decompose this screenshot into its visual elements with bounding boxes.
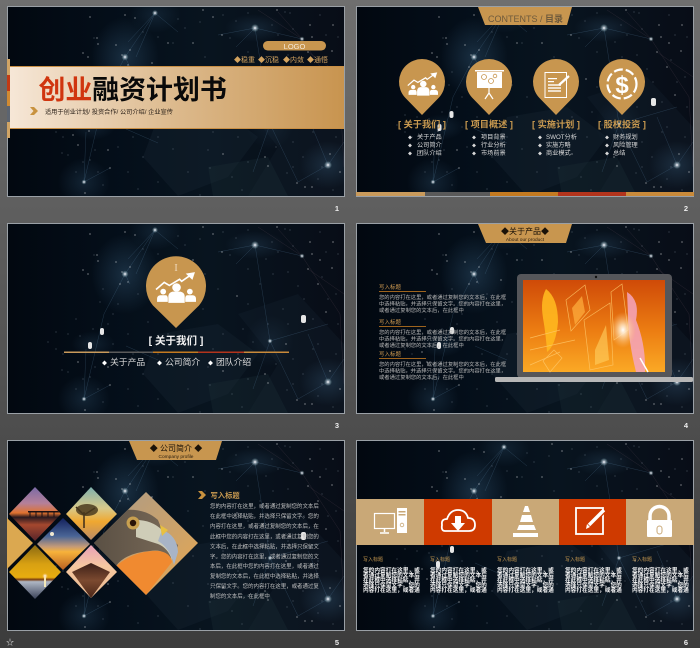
text block 1: 或者通过复制您的文本后，在此框中 xyxy=(379,306,464,314)
text block 3: 您的内容打在这里，或者通过复制您的文本后，在此框 xyxy=(379,360,507,368)
pin 1: about us: [ 关于我们 ] xyxy=(398,118,446,130)
subtitle: 适用于创业计划/ 投资合作/ 公司介绍/ 企业宣传 xyxy=(45,108,173,116)
heading tab xyxy=(129,441,222,460)
pin 2: project overview: 项目背景 xyxy=(481,133,506,141)
column 3 xyxy=(497,556,554,594)
pin 1: about us: 团队介绍 xyxy=(417,149,442,157)
section items: ◆ xyxy=(208,361,213,367)
column 3: 您的内容打在这里，或 xyxy=(497,566,554,574)
body text: 内容打在这里，或者通过复制您的文本后，在 xyxy=(210,522,319,530)
pin 2: project overview: ◆ xyxy=(472,151,476,156)
text block 3: 写入标题 xyxy=(379,350,402,358)
keyword tags: ◆通悟 xyxy=(307,55,328,64)
pin 1: about us: ◆ xyxy=(408,135,412,140)
pin 3: implementation plan: [ 实施计划 ] xyxy=(532,118,580,130)
column 5: 内容打在这里，或者通 xyxy=(632,586,689,594)
transition marker: ☆ xyxy=(6,638,14,647)
icon: traffic cone xyxy=(513,506,538,537)
body text: 复制您的文本后，在此框中选择粘贴，并选择 xyxy=(210,572,319,580)
column 3: 在此框中选择粘贴，并 xyxy=(497,576,554,584)
moon sunset photo xyxy=(37,518,90,570)
body text: 文本后，在此框中选择粘贴，并选择只保留文 xyxy=(210,542,319,550)
column 2: 您的内容打在这里，或 xyxy=(430,566,487,574)
heading tab: Company profile xyxy=(159,454,194,460)
pin 4: equity investment: $ xyxy=(615,72,629,99)
column 2: 者通过复制您的文本后 xyxy=(430,571,487,579)
section items xyxy=(102,356,251,367)
section items: 公司简介 xyxy=(165,356,200,367)
pin 1: about us: 公司简介 xyxy=(417,141,443,149)
pin 1: about us: ◆ xyxy=(408,151,412,156)
pin 2: project overview: 市场前景 xyxy=(481,149,506,157)
column 5: 者通过复制您的文本后 xyxy=(632,571,689,579)
column 4: 您的内容打在这里，或 xyxy=(565,566,622,574)
column 5: 在此框中选择粘贴，并 xyxy=(632,576,689,584)
text block 3 xyxy=(379,350,507,381)
keyword tags: ◆稳重 xyxy=(234,55,255,64)
column 3: 选择只保留文字。您的 xyxy=(497,581,554,589)
main title: 创业融资计划书 xyxy=(38,75,227,105)
column 3: 者通过复制您的文本后 xyxy=(497,571,554,579)
page number 2: 2 xyxy=(684,204,688,213)
column 1: 写入标题 xyxy=(363,556,383,563)
column 2: 内容打在这里，或者通 xyxy=(430,586,487,594)
heading tab: About our product xyxy=(506,237,545,243)
section items: ◆ xyxy=(157,361,162,367)
body text: 本后，在此框中您的内容打在这里，或者通过 xyxy=(210,562,319,570)
comet markers xyxy=(88,315,306,349)
heading tab: ◆ 公司简介 ◆ xyxy=(150,443,202,453)
column 2 xyxy=(430,556,487,594)
pier sunset photo xyxy=(9,487,61,541)
icon: edit pencil xyxy=(576,508,604,534)
keyword tags: ◆内敛 xyxy=(283,55,304,64)
chevron xyxy=(30,107,38,115)
heading chevron xyxy=(198,491,206,499)
logo pill: LOGO xyxy=(284,42,305,51)
column 5: 您的内容打在这里，或 xyxy=(632,566,689,574)
column 1: 在此框中选择粘贴，并 xyxy=(363,576,420,584)
body text: 只保留文字。您的内容打在这里，或者通过复 xyxy=(210,582,319,590)
column 1 xyxy=(363,556,420,594)
section items: 关于产品 xyxy=(110,356,145,367)
slide 6: icon columns xyxy=(356,431,700,640)
text block 3: 中选择粘贴，并选择只保留文字。您的内容打在这里， xyxy=(379,366,506,374)
text block 1 xyxy=(379,283,507,314)
colour rule xyxy=(64,352,289,353)
column 3: 写入标题 xyxy=(497,556,517,563)
body text: 您的内容打在这里，或者通过复制您的文本后 xyxy=(210,502,319,510)
contents tab: CONTENTS / 目录 xyxy=(488,13,563,24)
column 4 xyxy=(565,556,622,594)
section items: 团队介绍 xyxy=(216,356,251,367)
column 2: 选择只保留文字。您的 xyxy=(430,581,487,589)
pin 4: equity investment: ◆ xyxy=(605,151,609,156)
pier boards photo xyxy=(66,545,118,598)
pin 3: implementation plan: 实施方略 xyxy=(546,141,572,149)
column 5: 写入标题 xyxy=(632,556,652,563)
column 4: 选择只保留文字。您的 xyxy=(565,581,622,589)
pin 2: project overview: 行业分析 xyxy=(481,141,506,149)
laptop xyxy=(495,274,693,382)
column 5: 选择只保留文字。您的 xyxy=(632,581,689,589)
column 3: 内容打在这里，或者通 xyxy=(497,586,554,594)
comet marker xyxy=(301,532,306,540)
text heading: 写入标题 xyxy=(210,491,240,500)
page number 1: 1 xyxy=(335,204,339,213)
text block 1: 中选择粘贴，并选择只保留文字。您的内容打在这里， xyxy=(379,300,506,308)
pin 2: project overview: ◆ xyxy=(472,143,476,148)
column 1: 内容打在这里，或者通 xyxy=(363,586,420,594)
page number 5: 5 xyxy=(335,638,339,647)
pin 4: equity investment: ◆ xyxy=(605,135,609,140)
gold diamond xyxy=(7,518,33,569)
lighthouse photo xyxy=(9,545,61,599)
title band xyxy=(10,66,344,129)
keyword tags: ◆沉稳 xyxy=(258,55,279,64)
text block 1: 写入标题 xyxy=(379,283,402,291)
section pin xyxy=(146,256,206,328)
body text: 字。您的内容打在这里，或者通过复制您的文 xyxy=(210,552,319,560)
comet markers xyxy=(436,546,454,568)
pin 3: implementation plan xyxy=(532,59,580,157)
page number 3: 3 xyxy=(335,421,339,430)
pin 3: implementation plan: ◆ xyxy=(538,143,542,148)
pin 3: implementation plan: ◆ xyxy=(538,135,542,140)
body text: 制您的文本后，在此框中 xyxy=(210,592,270,600)
column 1: 者通过复制您的文本后 xyxy=(363,571,420,579)
column 4: 写入标题 xyxy=(565,556,585,563)
column 1: 选择只保留文字。您的 xyxy=(363,581,420,589)
text block 2: 您的内容打在这里，或者通过复制您的文本后，在此框 xyxy=(379,328,507,336)
icon: cloud download xyxy=(442,510,475,531)
column 2: 写入标题 xyxy=(430,556,450,563)
body text: 在此框中选择粘贴，并选择只保留文字。您的 xyxy=(210,512,319,520)
slide 5: company profile xyxy=(7,440,345,631)
column 2: 在此框中选择粘贴，并 xyxy=(430,576,487,584)
tree photo xyxy=(66,487,118,540)
pin 4: equity investment: ◆ xyxy=(605,143,609,148)
pin 4: equity investment: [ 股权投资 ] xyxy=(598,118,646,130)
pin 1: about us: 关于产品 xyxy=(417,133,442,141)
text block 1: 您的内容打在这里，或者通过复制您的文本后，在此框 xyxy=(379,293,507,301)
icon: padlock xyxy=(647,506,672,537)
heading tab xyxy=(478,224,572,243)
pin 3: implementation plan: SWOT分析 xyxy=(546,133,577,141)
pin 4: equity investment: 总结 xyxy=(613,149,625,157)
pin 2: project overview: ◆ xyxy=(472,135,476,140)
text block 2: 写入标题 xyxy=(379,318,402,326)
section heading: [ 关于我们 ] xyxy=(149,334,203,347)
column 4: 在此框中选择粘贴，并 xyxy=(565,576,622,584)
laptop screen artwork xyxy=(530,284,648,372)
bottom colour bar xyxy=(356,192,694,196)
page number 6: 6 xyxy=(684,638,688,647)
slide 2: contents xyxy=(356,0,700,206)
section pin: I xyxy=(174,263,178,274)
heading tab: ◆关于产品◆ xyxy=(501,226,549,236)
pin 3: implementation plan: 商业模式 xyxy=(546,149,571,157)
slide 3: section about us xyxy=(8,214,356,423)
body text xyxy=(210,502,319,600)
column 4: 者通过复制您的文本后 xyxy=(565,571,622,579)
diamond photo collage xyxy=(7,487,198,599)
pin 2: project overview xyxy=(465,59,513,157)
slide 4: about product xyxy=(356,214,700,423)
comet markers xyxy=(438,98,656,131)
pin 4: equity investment xyxy=(598,59,646,157)
column 1: 您的内容打在这里，或 xyxy=(363,566,420,574)
text block 2: 或者通过复制您的文本后，在此框中 xyxy=(379,341,464,349)
logo pill xyxy=(263,41,326,51)
text block 2: 中选择粘贴，并选择只保留文字。您的内容打在这里， xyxy=(379,334,506,342)
pin 3: implementation plan: ◆ xyxy=(538,151,542,156)
page number 4: 4 xyxy=(684,421,689,430)
pin 4: equity investment: 风险管理 xyxy=(613,141,638,149)
contents tab xyxy=(478,7,572,25)
column 4: 内容打在这里，或者通 xyxy=(565,586,622,594)
pin 1: about us: ◆ xyxy=(408,143,412,148)
column 5 xyxy=(632,556,689,594)
keyword tags xyxy=(234,55,328,64)
comet markers xyxy=(437,327,454,349)
text block 2 xyxy=(379,318,507,349)
eagle photo xyxy=(94,492,198,595)
slide 1: title cover xyxy=(7,0,356,206)
text block 3: 或者通过复制您的文本后，在此框中 xyxy=(379,373,464,381)
colour strip xyxy=(7,59,10,138)
icon tiles xyxy=(356,499,694,545)
section items: ◆ xyxy=(102,361,107,367)
pin 4: equity investment: 财务规划 xyxy=(613,133,638,141)
pin 2: project overview: [ 项目概述 ] xyxy=(465,118,513,130)
pin 1: about us xyxy=(398,59,446,157)
body text: 此框中您的内容打在这里，或者通过复制您的 xyxy=(210,532,319,540)
icon: computer xyxy=(374,508,407,533)
